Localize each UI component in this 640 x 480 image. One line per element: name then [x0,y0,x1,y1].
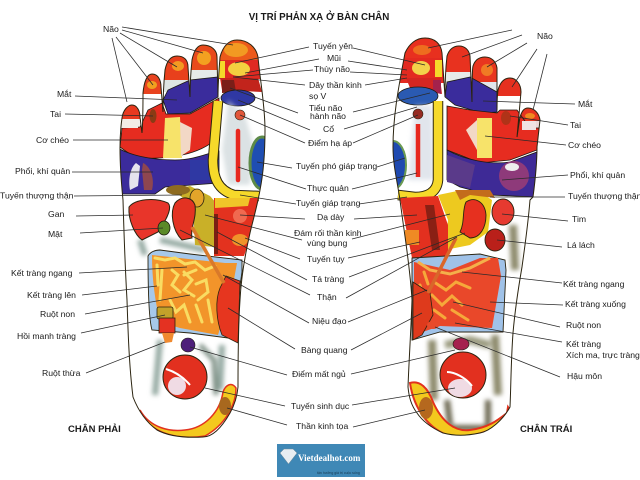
eye band [163,77,218,114]
blood pressure point left [413,109,423,119]
labels: centre column: sọ V [309,91,327,101]
lung band left [447,150,537,197]
labels: centre column: Tá tràng [312,274,344,284]
labels: centre column: Tuyến tụy [307,254,345,264]
genital zone circle [163,355,207,399]
cross muscle red zone [120,98,219,158]
appendix [162,333,174,343]
thyroid yellow band [213,101,259,196]
intestine left [412,254,506,340]
labels: left foot right column: Xích ma, trực tràng [566,350,640,360]
labels: centre column: Thực quản [307,183,349,193]
labels: centre column: Thận [317,292,337,302]
labels: left foot right column: Kết tràng ngang [563,279,625,289]
insomnia point [181,338,195,352]
logo: Vietdealhot.com: Vietdealhot.com [298,453,361,463]
blood pressure point [235,110,245,120]
labels: left foot right column [537,31,640,381]
labels: centre column: Tuyến yên [313,41,353,51]
sciatic nerve crescent left [410,382,510,436]
labels: centre column: Thùy não [314,64,350,74]
leader lines: left foot labels in centre [344,48,465,427]
labels: left foot right column: Tai [570,120,581,130]
labels: left foot right column: Tim [572,214,586,224]
labels: left foot right column: Cơ chéo [568,140,601,150]
foot caption: left foot: CHÂN TRÁI [520,423,572,435]
labels: centre column: Mũi [327,53,341,63]
foot caption: right foot: CHÂN PHẢI [68,423,121,435]
labels: right foot left column: Hồi manh tràng [17,331,76,341]
ureter left [428,238,456,293]
digestive organs right foot [166,185,258,256]
big toe zones of right foot [219,40,262,106]
gallbladder [158,221,170,235]
labels: left foot right column: Ruột non [566,320,601,330]
labels: right foot left column: Ruột non [40,309,75,319]
labels: left foot right column: Phổi, khí quản [570,170,625,180]
smears right foot [140,100,255,395]
labels: centre column: Dây thần kinh [309,80,362,90]
labels: left foot right column: Kết tràng xuống [565,299,626,309]
labels: centre column: Cổ [323,124,334,134]
leader lines: left foot labels on right side [428,30,575,377]
labels: centre column: Dạ dày [317,212,345,222]
labels: centre column: vùng bụng [307,238,347,248]
ureter [192,227,224,283]
kidney [172,198,195,240]
labels: right foot left column: Tai [50,109,61,119]
labels: centre column: Đám rối thần kinh [294,228,362,238]
labels: right foot left column: Cơ chéo [36,135,69,145]
smears left foot [408,105,515,428]
labels: centre column [291,41,377,431]
labels: right foot left column: Não [103,24,119,34]
labels: left foot right column: Hậu môn [567,371,602,381]
labels: right foot left column: Kết tràng ngang [11,268,73,278]
labels: left foot right column: Não [537,31,553,41]
left foot illustration [380,36,540,436]
cecum [157,307,175,333]
leader lines: right foot labels in centre [180,47,319,425]
right foot outline [120,40,265,437]
labels: right foot left column: Tuyến thượng thận [0,190,74,200]
toes of right foot [120,42,218,127]
thyroid yellow band left [398,101,438,197]
parathyroid blue zone [248,136,264,190]
stomach [460,200,486,238]
labels: left foot right column: Kết tràng [566,339,601,349]
labels: right foot left column: Phổi, khí quản [15,166,70,176]
labels: centre column: Thần kinh tọa [296,421,348,431]
labels: left foot right column: Lá lách [567,240,595,250]
leader lines: right foot labels on left side [65,27,233,373]
labels: right foot left column [0,24,119,378]
labels: left foot right column: Mắt [578,99,593,109]
labels: centre column: Niệu đạo [312,316,347,326]
labels: centre column: Điểm mất ngủ [292,369,346,379]
spleen [485,229,505,251]
logo: Vietdealhot.com: tận hưởng giá trị cuộc sống [317,471,360,475]
labels: centre column: hành não [310,111,346,121]
title: VỊ TRÍ PHẢN XẠ Ở BÀN CHÂN [249,11,389,23]
digestive organs left foot [400,190,495,258]
esophagus stripe [236,131,240,180]
labels: centre column: Bàng quang [301,345,348,355]
eye band left [445,77,497,113]
icon: diamond [280,449,297,464]
labels: centre column: Tuyến giáp trạng [296,198,361,208]
labels: right foot left column: Mật [48,229,63,239]
labels: centre column: Tiểu não [309,103,342,113]
intestine [148,250,242,338]
logo: Vietdealhot.com [277,444,365,477]
labels: right foot left column: Kết tràng lên [27,290,76,300]
bladder [217,276,240,343]
labels: right foot left column: Mắt [57,89,72,99]
heart [492,199,514,225]
lung band [118,148,219,194]
right foot illustration [118,38,274,437]
toes of left foot [445,44,540,130]
genital zone circle left [440,352,486,398]
left foot outline [393,38,540,435]
parathyroid blue zone left [394,140,407,188]
esophagus stripe left [416,124,420,177]
bladder left [413,282,433,340]
labels: centre column: Tuyến sinh dục [291,401,350,411]
cross muscle red zone left [447,106,540,163]
labels: left foot right column: Tuyến thượng thận [568,191,640,201]
labels: right foot left column: Gan [48,209,65,219]
liver [129,200,170,240]
insomnia point left [453,338,469,350]
sciatic nerve crescent [140,385,236,437]
big toe zones of left foot [398,36,444,105]
anus [427,321,439,329]
labels: centre column: Điểm hạ áp [308,138,352,148]
labels: right foot left column: Ruột thừa [42,368,81,378]
labels: centre column: Tuyến phó giáp trạng [296,161,377,171]
